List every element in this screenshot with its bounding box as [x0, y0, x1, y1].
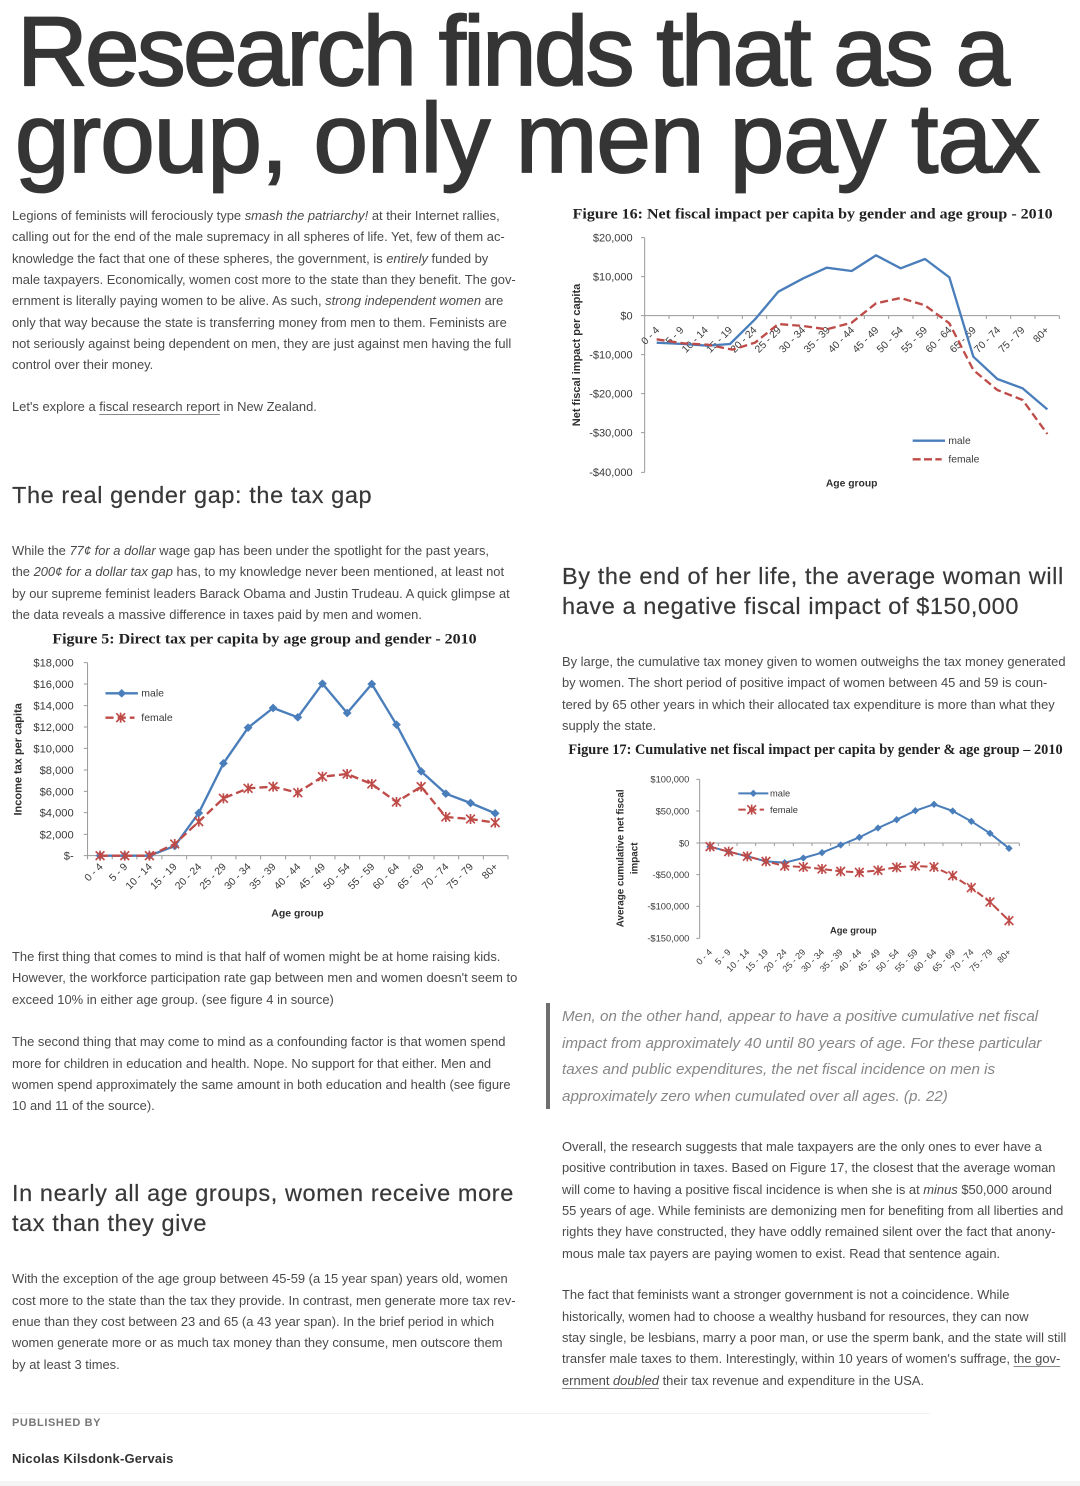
- quote text: Men, on the other hand, appear to have a positive cumulative net fiscal: [562, 1008, 1038, 1025]
- y axis labels: $0: [620, 310, 633, 322]
- x axis labels: 65 - 69: [948, 325, 979, 356]
- text block: cumulative tax: tered by 65 other years in which their allocated tax expenditure is more than what they: [562, 697, 1055, 712]
- x axis labels: 0 - 4: [83, 862, 106, 884]
- text block: overall: 55 years of age. While feminists are demonizing men for benefiting from all liberties and: [562, 1203, 1063, 1218]
- text block: participation: exceed 10% in either age group. (see figure 4 in source): [12, 992, 334, 1007]
- y axis labels: $18,000: [33, 658, 74, 670]
- y axis labels: $20,000: [593, 232, 633, 244]
- footer: publisher: [12, 1413, 930, 1469]
- male series: [100, 684, 495, 856]
- chart title: Figure 17: Cumulative net fiscal impact per capita by gender & age group – 2010: [568, 742, 1063, 758]
- y axis labels: [589, 232, 633, 479]
- legend: male: [770, 789, 790, 799]
- chart: figure 17 cumulative net fiscal impact: [568, 742, 1063, 974]
- x axis labels: 15 - 19: [149, 862, 180, 892]
- text block: tax gap: the 200¢ for a dollar tax gap has, to my knowledge never been mentioned, at least not: [12, 564, 504, 579]
- y axis labels: $-: [64, 851, 74, 863]
- heading: age groups: [12, 1180, 514, 1236]
- text block: introduction: ernment is literally paying women to be alive. As such, strong independent women are: [12, 293, 503, 308]
- x axis labels: 70 - 74: [420, 862, 452, 892]
- y axis labels: -$10,000: [589, 349, 633, 361]
- heading: negative fiscal impact: By the end of her life, the average woman will: [562, 562, 1064, 588]
- y axis labels: $2,000: [40, 829, 74, 841]
- x axis labels: 70 - 74: [949, 947, 976, 974]
- y axis labels: $16,000: [33, 679, 74, 691]
- legend: female: [770, 805, 798, 815]
- x axis labels: 0 - 4: [694, 947, 714, 967]
- x axis labels: 45 - 49: [851, 325, 882, 356]
- text block: introduction: only that way because the state is transferring money from men to them. Feminists are: [12, 315, 507, 330]
- text block: age groups: by at least 3 times.: [12, 1357, 120, 1372]
- x axis labels: 10 - 14: [725, 947, 751, 974]
- x axis labels: 5 - 9: [664, 325, 687, 347]
- x axis labels: 10 - 14: [680, 325, 711, 356]
- y axis labels: $8,000: [40, 765, 74, 777]
- text block: age groups: women generate more or as much tax money than they consume, men outscore them: [12, 1335, 503, 1350]
- y axis labels: [33, 658, 74, 863]
- x axis labels: 15 - 19: [743, 947, 770, 974]
- x axis labels: 80+: [1032, 325, 1052, 345]
- y axis labels: -$100,000: [647, 902, 689, 912]
- text block: overall: rights they have constructed, they have oddly remained silent over the fact that anony-: [562, 1224, 1055, 1239]
- x axis labels: 5 - 9: [108, 862, 130, 884]
- text block: age groups: [12, 1271, 516, 1372]
- text block: cumulative tax: [562, 654, 1066, 733]
- x axis labels: [694, 947, 1013, 974]
- x axis labels: 25 - 29: [198, 862, 229, 892]
- text block: cumulative tax: By large, the cumulative tax money given to women outweighs the tax money generated: [562, 654, 1066, 669]
- text block: confounding factor: women spend approximately the same amount in both education and health (see figure: [12, 1077, 511, 1092]
- chart: figure 16 net fiscal impact: [571, 206, 1060, 489]
- text block: overall: [562, 1139, 1063, 1261]
- x axis labels: 40 - 44: [827, 325, 857, 356]
- y axis labels: -$40,000: [589, 467, 633, 479]
- y axis labels: $10,000: [33, 743, 74, 755]
- x axis labels: 50 - 54: [322, 862, 353, 892]
- x axis labels: 75 - 79: [445, 862, 476, 892]
- x axis labels: 65 - 69: [930, 947, 957, 974]
- text block: stronger government: stay single, be lesbians, marry a poor man, or use the sperm bank, and the state will still: [562, 1330, 1066, 1345]
- text block: stronger government: ernment doubled their tax revenue and expenditure in the USA.: [562, 1373, 924, 1388]
- author name: Nicolas Kilsdonk-Gervais: [12, 1451, 174, 1466]
- text block: confounding factor: 10 and 11 of the source).: [12, 1098, 155, 1113]
- y axis labels: -$30,000: [589, 427, 633, 439]
- text block: report link: Let's explore a fiscal research report in New Zealand.: [12, 399, 317, 414]
- x axis labels: 50 - 54: [874, 947, 901, 974]
- y axis labels: $12,000: [33, 722, 74, 734]
- x axis labels: 30 - 34: [799, 947, 826, 974]
- x axis labels: [640, 325, 1052, 356]
- text block: overall: positive contribution in taxes. Based on Figure 17, the closest that the average woman: [562, 1160, 1055, 1175]
- heading: tax gap: The real gender gap: the tax gap: [12, 482, 372, 508]
- legend: female: [948, 455, 980, 466]
- axis titles: Age group: [830, 926, 877, 936]
- x axis labels: 35 - 39: [802, 325, 833, 356]
- text block: overall: will come to having a positive fiscal incidence is when she is at minus $50,000 around: [562, 1182, 1052, 1197]
- y axis labels: -$50,000: [653, 870, 689, 880]
- text block: introduction: Legions of feminists will ferociously type smash the patriarchy! at their Internet rallies,: [12, 208, 500, 223]
- x axis labels: 55 - 59: [893, 947, 920, 974]
- text block: participation: [12, 949, 517, 1007]
- x axis labels: 20 - 24: [173, 862, 204, 892]
- text block: cumulative tax: supply the state.: [562, 718, 656, 733]
- text block: introduction: knowledge the fact that one of these spheres, the government, is entirely funded by: [12, 251, 488, 266]
- x axis labels: 40 - 44: [272, 862, 303, 892]
- y axis labels: $100,000: [650, 775, 689, 785]
- y axis labels: [647, 775, 689, 944]
- x axis labels: [83, 862, 501, 892]
- x axis labels: 20 - 24: [729, 325, 760, 356]
- text block: introduction: calling out for the end of the male supremacy in all spheres of life. Yet, few of them ac-: [12, 229, 505, 244]
- y axis labels: $4,000: [40, 808, 74, 820]
- chart title: Figure 5: Direct tax per capita by age group and gender - 2010: [52, 631, 477, 647]
- x axis labels: 75 - 79: [997, 325, 1028, 356]
- text block: stronger government: transfer male taxes to them. Interestingly, within 10 years of women's suffrage, the gov-: [562, 1351, 1060, 1366]
- x axis labels: 30 - 34: [223, 862, 254, 892]
- text block: participation: The first thing that comes to mind is that half of women might be at home raising kids.: [12, 949, 500, 964]
- y axis labels: $14,000: [33, 701, 74, 713]
- heading: age groups: In nearly all age groups, women receive more: [12, 1180, 514, 1206]
- text block: confounding factor: more for children in education and health. Nope. No support for that either. Men and: [12, 1056, 491, 1071]
- x axis labels: 80+: [480, 862, 501, 882]
- x axis labels: 35 - 39: [248, 862, 279, 892]
- legend: male: [141, 689, 164, 700]
- legend: [105, 689, 173, 724]
- x axis labels: 0 - 4: [640, 325, 662, 347]
- x axis labels: 55 - 59: [346, 862, 377, 892]
- text block: stronger government: [562, 1287, 1066, 1389]
- x axis labels: 70 - 74: [973, 325, 1003, 356]
- y axis labels: -$150,000: [647, 934, 689, 944]
- x axis labels: 20 - 24: [762, 947, 789, 974]
- y axis labels: -$20,000: [589, 388, 633, 400]
- legend: [913, 436, 980, 466]
- heading: negative fiscal impact: [562, 562, 1064, 620]
- axes: [696, 779, 1019, 938]
- text block: confounding factor: [12, 1034, 511, 1113]
- axis titles: Age group: [826, 478, 877, 489]
- axes: [641, 238, 1059, 472]
- y axis labels: $10,000: [593, 271, 633, 283]
- legend: male: [948, 436, 971, 447]
- x axis labels: 25 - 29: [753, 325, 784, 356]
- title: [15, 0, 1041, 194]
- x axis labels: 60 - 64: [371, 862, 402, 892]
- title: group, only men pay tax: [15, 83, 1040, 193]
- chart title: Figure 16: Net fiscal impact per capita by gender and age group - 2010: [573, 206, 1053, 222]
- text block: age groups: cost more to the state than the tax they provide. In contrast, men generate more tax rev-: [12, 1293, 516, 1308]
- text block: overall: Overall, the research suggests that male taxpayers are the only ones to ever have a: [562, 1139, 1042, 1154]
- footer band: [0, 1481, 1080, 1486]
- x axis labels: 55 - 59: [900, 325, 930, 356]
- x axis labels: 15 - 19: [705, 325, 735, 356]
- x axis labels: 65 - 69: [396, 862, 427, 892]
- x axis labels: 75 - 79: [968, 947, 994, 974]
- quote text: taxes and public expenditures, the net fiscal incidence on men is: [562, 1061, 995, 1078]
- legend: female: [141, 713, 173, 724]
- axis titles: Age group: [271, 908, 324, 919]
- chart: figure 17 cumulative net fiscal impact: impact: [629, 842, 640, 874]
- text block: stronger government: historically, women had to choose a wealthy husband for resources, they can now: [562, 1309, 1029, 1324]
- x axis labels: 45 - 49: [297, 862, 328, 892]
- text block: age groups: With the exception of the age group between 45-59 (a 15 year span) years old, women: [12, 1271, 508, 1286]
- chart: figure 5 direct tax per capita: Income tax per capita: [13, 702, 25, 816]
- published by label: PUBLISHED BY: [12, 1417, 101, 1429]
- x axis labels: 80+: [995, 947, 1013, 965]
- heading: negative fiscal impact: have a negative fiscal impact of $150,000: [562, 593, 1019, 619]
- quote text: approximately zero when cumulated over all ages. (p. 22): [562, 1088, 948, 1105]
- legend: [738, 789, 798, 815]
- y axis labels: $0: [679, 838, 689, 848]
- chart: figure 5 direct tax per capita: [13, 631, 508, 919]
- quote text: impact from approximately 40 until 80 years of age. For these particular: [562, 1035, 1041, 1052]
- text block: cumulative tax: by women. The short period of positive impact of women between 45 and 59 is coun-: [562, 675, 1047, 690]
- x axis labels: 40 - 44: [837, 947, 863, 974]
- text block: age groups: enue than they cost between 23 and 65 (a 43 year span). In the brief period in which: [12, 1314, 494, 1329]
- x axis labels: 5 - 9: [713, 947, 733, 967]
- quote text: [562, 1008, 1042, 1105]
- male series: [710, 804, 1009, 863]
- text block: tax gap: [12, 543, 510, 622]
- x axis labels: 60 - 64: [924, 325, 955, 356]
- text block: overall: mous male tax payers are paying women to exist. Read that sentence again.: [562, 1246, 1000, 1261]
- chart: figure 17 cumulative net fiscal impact: Average cumulative net fiscal: [615, 789, 626, 927]
- text block: tax gap: by our supreme feminist leaders Barack Obama and Justin Trudeau. A quick glimpse at: [12, 586, 510, 601]
- text block: introduction: control over their money.: [12, 357, 153, 372]
- x axis labels: 60 - 64: [912, 947, 938, 974]
- x axis labels: 35 - 39: [818, 947, 845, 974]
- x axis labels: 25 - 29: [781, 947, 807, 974]
- female series: [100, 774, 495, 856]
- text block: introduction: [12, 208, 516, 372]
- text block: stronger government: The fact that feminists want a stronger government is not a coincidence. While: [562, 1287, 1009, 1302]
- x axis labels: 50 - 54: [875, 325, 906, 356]
- male series: [657, 255, 1047, 409]
- x axis labels: 30 - 34: [778, 325, 808, 356]
- axes: [84, 663, 508, 859]
- female series: [710, 847, 1009, 921]
- text block: tax gap: While the 77¢ for a dollar wage gap has been under the spotlight for the past years,: [12, 543, 489, 558]
- text block: tax gap: the data reveals a massive difference in taxes paid by men and women.: [12, 607, 422, 622]
- text block: introduction: not seriously against being dependent on men, they are just against men having the full: [12, 336, 511, 351]
- chart: figure 16 net fiscal impact: Net fiscal impact per capita: [571, 283, 583, 426]
- y axis labels: $50,000: [656, 806, 689, 816]
- text block: introduction: male taxpayers. Economically, women cost more to the state than they benefit. The gov-: [12, 272, 516, 287]
- quote bar: [546, 1003, 550, 1109]
- female series: [657, 298, 1047, 434]
- heading: age groups: tax than they give: [12, 1210, 207, 1236]
- text block: participation: However, the workforce participation rate gap between men and women doesn't seem to: [12, 970, 517, 985]
- x axis labels: 10 - 14: [124, 862, 155, 892]
- text block: confounding factor: The second thing that may come to mind as a confounding factor is that women spend: [12, 1034, 505, 1049]
- y axis labels: $6,000: [40, 786, 74, 798]
- x axis labels: 45 - 49: [855, 947, 882, 974]
